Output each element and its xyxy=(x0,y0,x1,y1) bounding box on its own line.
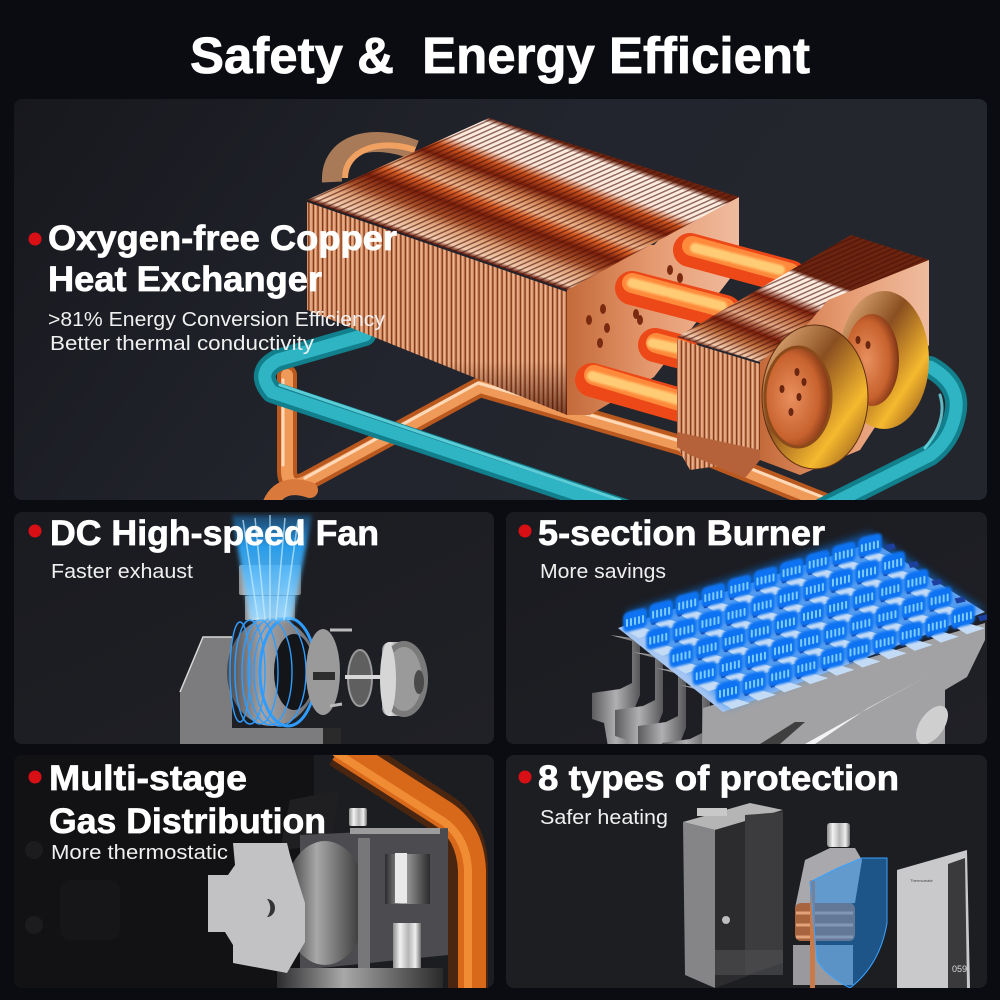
illustration: fan assembly xyxy=(180,515,428,744)
description: More savings xyxy=(540,561,666,583)
burner side body xyxy=(702,623,985,744)
impeller xyxy=(348,650,372,706)
tube holes xyxy=(586,265,683,348)
cover plate xyxy=(306,629,340,715)
illustration: water heater exploded view xyxy=(683,803,970,988)
blower mounting plate xyxy=(180,637,323,744)
heading: Gas Distribution xyxy=(49,802,326,841)
bullet xyxy=(28,770,42,784)
panel: protection xyxy=(506,755,987,988)
illustration: copper heat exchanger xyxy=(265,118,956,510)
panel: copper heat exchanger xyxy=(14,99,987,510)
heading: 5-section Burner xyxy=(538,514,825,553)
burner fins xyxy=(592,635,710,744)
rear case xyxy=(683,803,783,988)
airflow xyxy=(232,515,312,620)
blue air rings xyxy=(230,618,316,726)
panel: DC fan xyxy=(14,512,494,744)
description xyxy=(48,309,385,355)
bullet xyxy=(518,770,532,784)
heading xyxy=(49,759,326,841)
valve drum xyxy=(292,841,358,965)
front panel xyxy=(897,850,970,988)
panel: burner xyxy=(506,512,987,744)
description: Better thermal conductivity xyxy=(50,333,314,355)
title: Safety & Energy Efficient xyxy=(190,27,810,84)
internal assembly xyxy=(793,823,862,988)
second fin block: front fins xyxy=(677,339,760,470)
front panel: Thermomate xyxy=(910,878,933,883)
main fin block: end plate xyxy=(567,197,739,415)
panel: gas distribution xyxy=(14,748,494,992)
blower housing xyxy=(227,618,317,726)
second fin block: end plate xyxy=(760,260,929,475)
second fin block: top xyxy=(677,235,929,362)
bullet xyxy=(28,524,42,538)
collar xyxy=(239,565,301,595)
blue protection shield xyxy=(810,858,887,988)
glowing tubes xyxy=(592,246,790,405)
bullet xyxy=(28,232,42,246)
description: >81% Energy Conversion Efficiency xyxy=(48,309,385,331)
illustration: burner xyxy=(592,528,987,744)
U-bend: rear xyxy=(839,291,929,429)
heading: Heat Exchanger xyxy=(48,260,322,299)
valve front plate xyxy=(208,843,305,973)
motor xyxy=(382,642,398,716)
heading: 8 types of protection xyxy=(538,759,899,798)
main fin block: top ridges xyxy=(307,118,739,290)
burner top plate xyxy=(618,542,985,712)
illustration: gas valve xyxy=(14,748,472,992)
valve rear body xyxy=(300,828,448,970)
U-bend: front xyxy=(762,325,868,469)
heading xyxy=(48,219,397,299)
blue flames xyxy=(623,532,989,709)
description: Safer heating xyxy=(540,807,668,829)
teal water pipe xyxy=(265,335,956,510)
faded background machinery xyxy=(14,755,340,988)
return bend, back left xyxy=(332,142,415,182)
description: Faster exhaust xyxy=(51,561,193,583)
heading: DC High-speed Fan xyxy=(50,514,379,553)
main fin block: front fins xyxy=(307,202,567,415)
heading: Oxygen-free Copper xyxy=(48,219,397,258)
bullet xyxy=(518,524,532,538)
description: More thermostatic xyxy=(51,842,228,864)
orange pipe xyxy=(335,748,472,992)
heading: Multi-stage xyxy=(49,759,247,798)
copper frame pipes xyxy=(270,375,830,505)
front panel: 059 xyxy=(952,964,967,974)
